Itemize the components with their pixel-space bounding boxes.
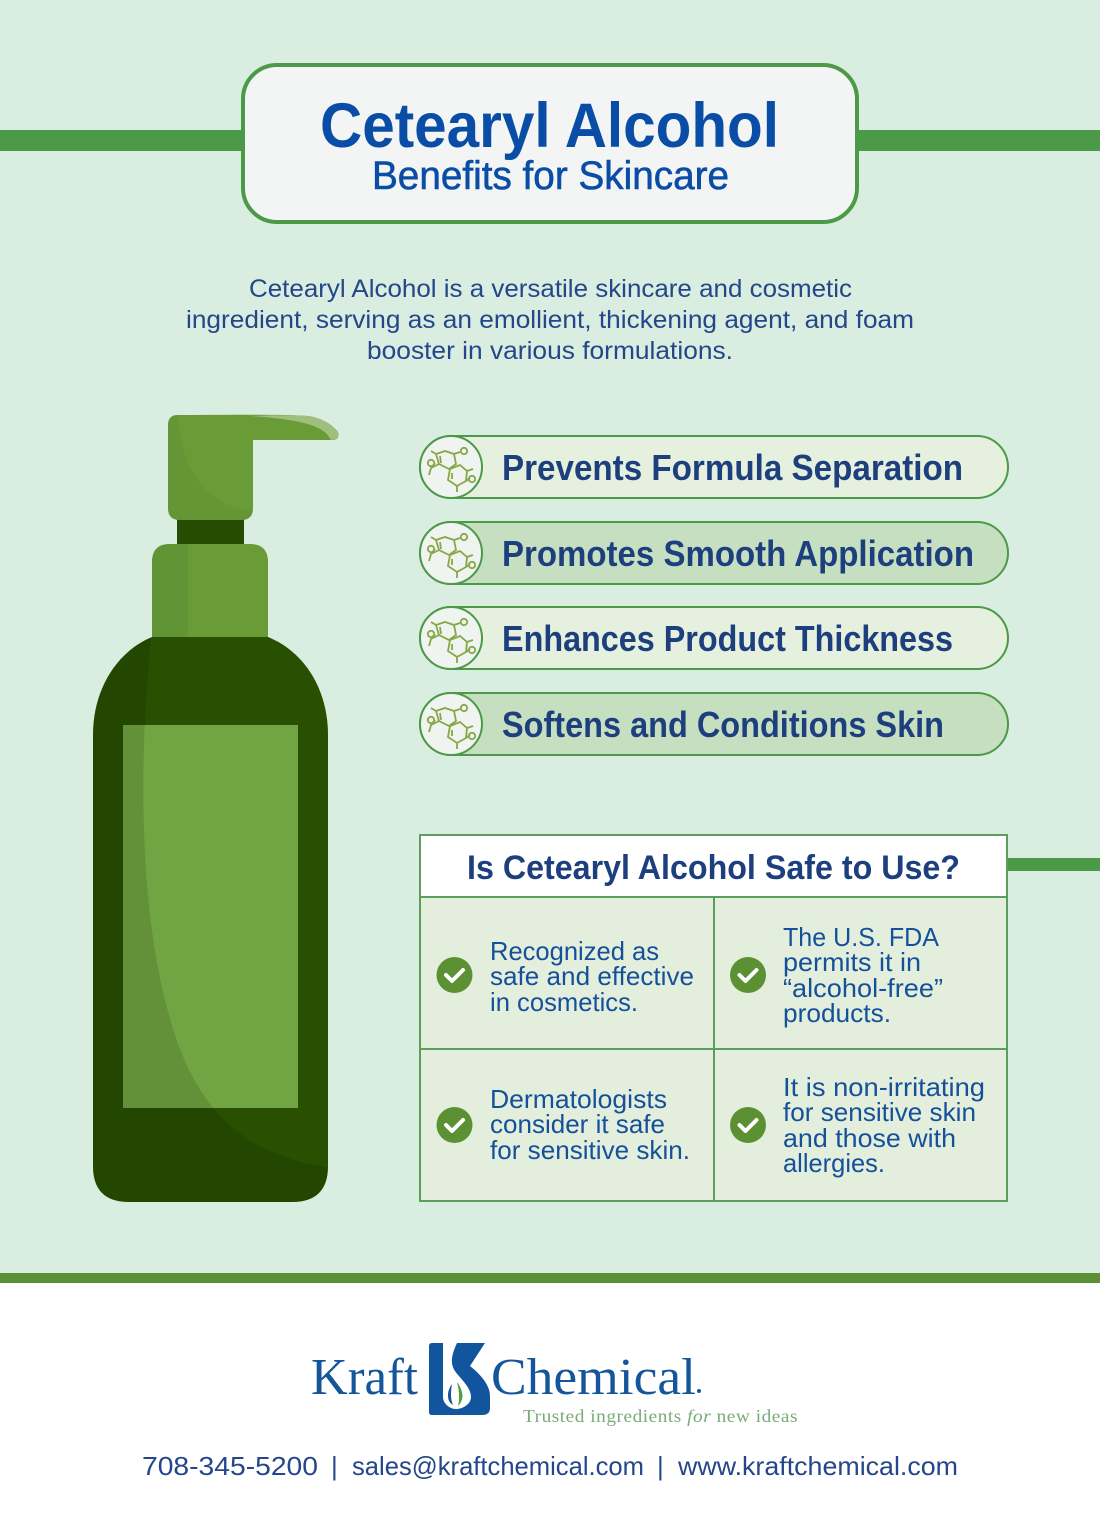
panel: safety table: [420, 835, 1007, 1201]
icon: check: [730, 957, 766, 993]
cell: dermatologists: [436, 1084, 690, 1165]
contact line: sales@kraftchemical.com: [352, 1451, 644, 1481]
cell: recognized as safe: in cosmetics.: [490, 987, 638, 1017]
benefit: promotes smooth application: [420, 522, 1008, 584]
table heading: Is Cetearyl Alcohol Safe to Use?: [467, 849, 960, 887]
contact line: 708-345-5200: [142, 1451, 318, 1481]
contact line: www.kraftchemical.com: [677, 1451, 958, 1481]
contact line: |: [657, 1451, 664, 1481]
icon: molecule: [420, 522, 482, 584]
title: Cetearyl Alcohol: [320, 91, 779, 161]
icon: check: [436, 1107, 472, 1143]
label: [123, 725, 298, 1108]
benefit: softens and conditions skin: [420, 693, 1008, 755]
contact line: |: [331, 1451, 338, 1481]
bottle body: [93, 637, 328, 1202]
icon: molecule: [420, 436, 482, 498]
tagline: Trusted ingredients for new ideas: [523, 1406, 798, 1426]
cell: non-irritating: allergies.: [783, 1148, 885, 1178]
cell: dermatologists: Dermatologists: [490, 1084, 667, 1114]
neck: [152, 544, 268, 640]
cell: non-irritating: for sensitive skin: [783, 1097, 976, 1127]
cell: FDA: permits it in: [783, 947, 921, 977]
logo mark: [429, 1343, 490, 1415]
benefit: softens and conditions skin: Softens and Conditions Skin: [502, 704, 944, 745]
cell: recognized as safe: Recognized as: [490, 936, 659, 966]
footer panel: [0, 1273, 1100, 1536]
cell: recognized as safe: [436, 936, 694, 1017]
icon: molecule: [420, 607, 482, 669]
table heading: [420, 835, 1007, 897]
cell: dermatologists: for sensitive skin.: [490, 1135, 690, 1165]
intro text: Cetearyl Alcohol is a versatile skincare and cosmetic: [249, 275, 852, 303]
cell: non-irritating: It is non-irritating: [783, 1072, 985, 1102]
logo: Chemical: [491, 1349, 696, 1406]
title panel: [243, 65, 857, 222]
header lines: [0, 130, 1100, 151]
intro text: ingredient, serving as an emollient, thickening agent, and foam: [186, 306, 914, 334]
cell: non-irritating: [730, 1072, 985, 1178]
intro text: booster in various formulations.: [367, 337, 733, 365]
cell: FDA: The U.S. FDA: [783, 922, 940, 952]
logo: Kraft: [311, 1349, 419, 1406]
pump collar: [177, 515, 244, 550]
benefit: prevents formula separation: Prevents Formula Separation: [502, 447, 963, 488]
bottle shadow: [85, 630, 335, 1210]
intro text: [186, 275, 914, 365]
icon: check: [436, 957, 472, 993]
subtitle: Benefits for Skincare: [372, 154, 729, 198]
cell: FDA: products.: [783, 998, 891, 1028]
icon: check: [730, 1107, 766, 1143]
icon: molecule: [420, 693, 482, 755]
benefit: enhances product thickness: Enhances Product Thickness: [502, 618, 953, 659]
cell: dermatologists: consider it safe: [490, 1109, 665, 1139]
pump head: [168, 415, 338, 520]
benefit: prevents formula separation: [420, 436, 1008, 498]
cell: recognized as safe: safe and effective: [490, 961, 694, 991]
benefit: enhances product thickness: [420, 607, 1008, 669]
illustration: pump bottle: [85, 410, 338, 1210]
cell: non-irritating: and those with: [783, 1123, 956, 1153]
logo: [311, 1343, 798, 1426]
benefit: promotes smooth application: Promotes Smooth Application: [502, 533, 974, 574]
contact line: [142, 1451, 958, 1481]
side connector line: [1006, 858, 1100, 871]
cell: FDA: [730, 922, 943, 1028]
cell: FDA: “alcohol-free”: [783, 973, 943, 1003]
